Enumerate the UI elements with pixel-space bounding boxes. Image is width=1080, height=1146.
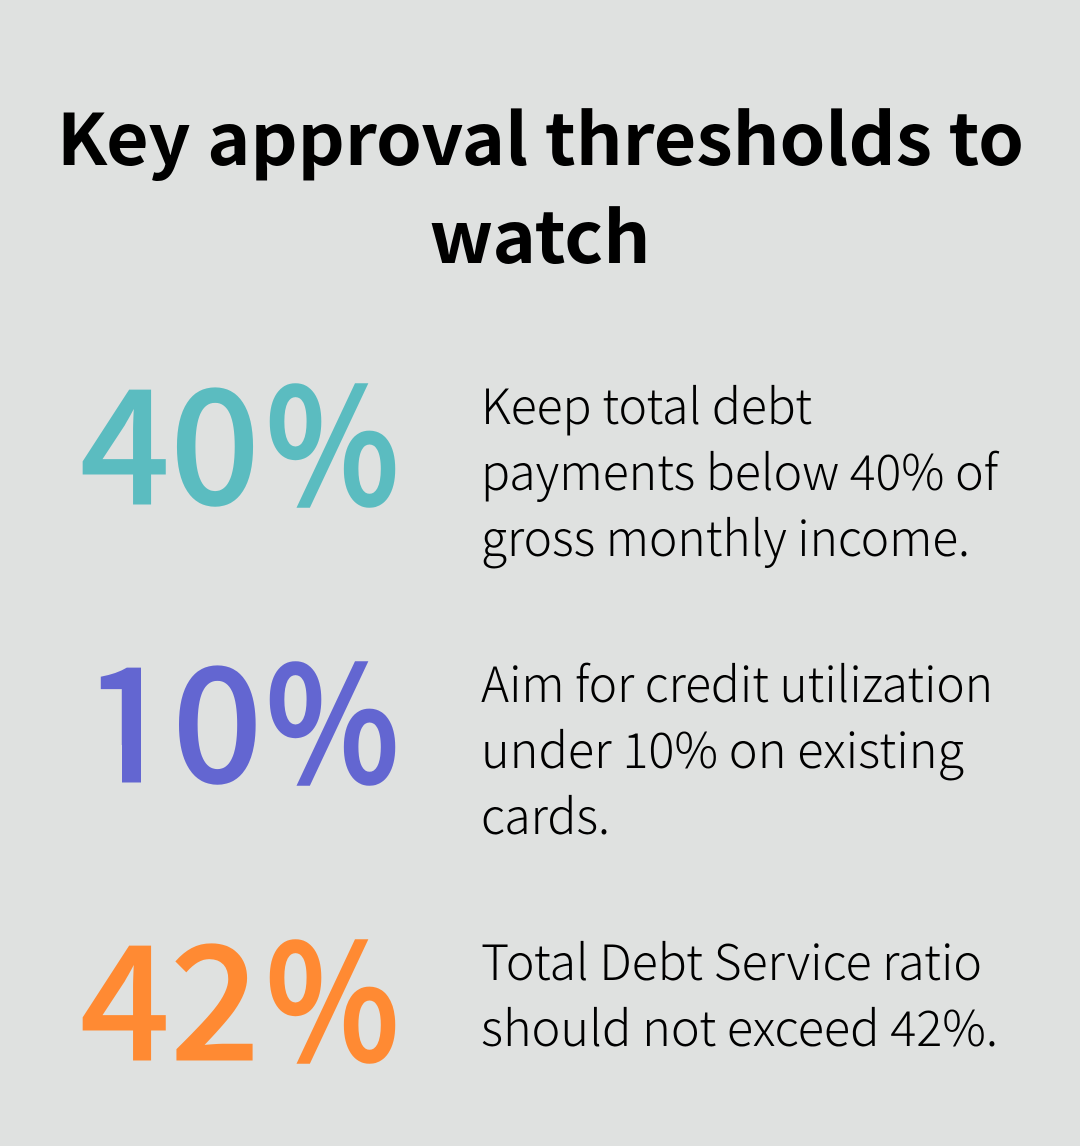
description: debt payments: gross monthly income.	[481, 500, 970, 571]
title	[57, 84, 1024, 284]
stat number: 40%: 40	[80, 320, 260, 550]
stat number: 40%: %	[266, 320, 399, 550]
stat number: 10%	[100, 661, 396, 786]
description: credit utilization: Aim for credit utilization	[481, 646, 993, 717]
description: debt payments: payments below 40% of	[481, 434, 999, 505]
stat number: 10%: 0	[172, 598, 263, 828]
title: Key approval thresholds to	[57, 84, 1024, 186]
stat number: 40%	[80, 320, 399, 550]
title: watch	[430, 182, 650, 284]
stat number: 42%: 42	[80, 876, 260, 1106]
description: debt payments	[481, 368, 999, 571]
description: credit utilization: cards.	[481, 778, 610, 849]
description: total debt service: Total Debt Service ratio	[481, 924, 982, 995]
description: total debt service	[481, 924, 998, 1061]
stat number: 42%: %	[266, 876, 399, 1106]
description: credit utilization	[481, 646, 993, 849]
stat row: 10%	[100, 661, 989, 834]
stat number: 42%	[80, 876, 399, 1106]
stat row: 40%	[80, 320, 999, 571]
stat number: 10%: 1	[83, 598, 174, 828]
description: credit utilization: under 10% on existing	[481, 712, 964, 783]
stat number: 10%: %	[266, 598, 399, 828]
description: total debt service: should not exceed 42%.	[481, 990, 998, 1061]
description: debt payments: Keep total debt	[481, 368, 812, 439]
stat row: 42%	[80, 876, 998, 1106]
